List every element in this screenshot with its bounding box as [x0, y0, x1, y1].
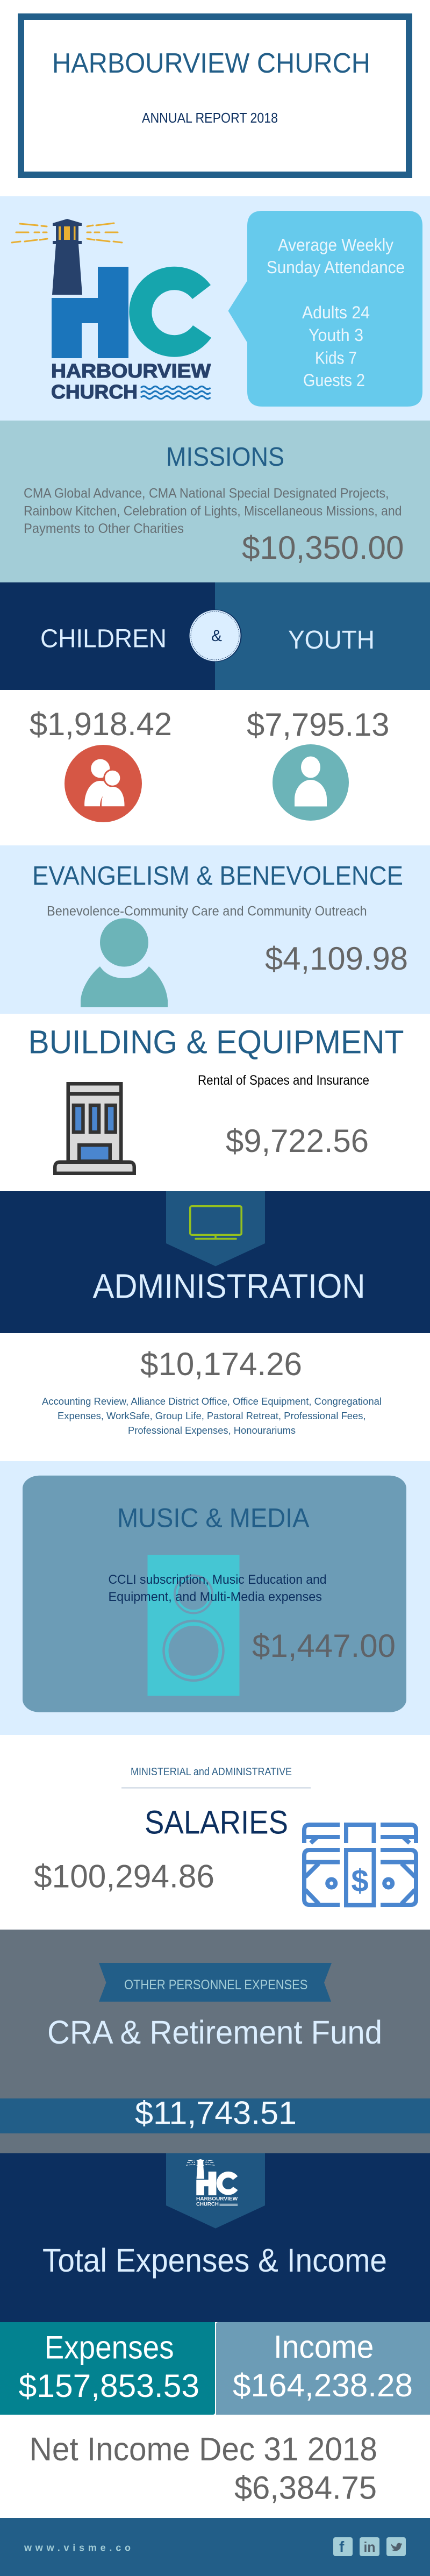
salaries amount: $100,294.86: [34, 1859, 214, 1895]
pennant with monitor icon: [166, 1191, 265, 1266]
icon: money: $: [351, 1863, 369, 1898]
administration description: Accounting Review, Alliance District Office, Office Equipment, Congregational: [42, 1396, 382, 1407]
panel: expenses: Expenses: [45, 2329, 174, 2365]
amount band: [0, 2095, 430, 2133]
administration amount: $10,174.26: [140, 1346, 302, 1382]
logo: Harbourview Church: [12, 219, 211, 403]
callout: average weekly Sunday attendance: Kids 7: [315, 348, 357, 368]
panel: administration header: [0, 1191, 430, 1333]
panel: title frame: [21, 17, 409, 175]
logo: Harbourview Church: HARBOURVIEW: [51, 360, 211, 382]
panel: income: $164,238.28: [233, 2367, 413, 2403]
ampersand badge: [189, 610, 242, 661]
music description: CCLI subscription, Music Education and: [109, 1572, 327, 1587]
panel: total expenses and income: [0, 2153, 430, 2322]
heading: CRA and retirement fund: CRA & Retirement Fund: [47, 2014, 382, 2051]
panel: net income: Net Income Dec 31 2018: [30, 2431, 377, 2467]
icon: money: [304, 1825, 416, 1905]
panel: music and media: [0, 1461, 430, 1735]
music card: [23, 1476, 406, 1712]
panel: children and youth amounts: [0, 690, 430, 845]
icon: linkedin: in: [363, 2539, 375, 2555]
callout: average weekly Sunday attendance: Youth 3: [309, 325, 363, 345]
panel: logo and attendance: [0, 196, 430, 421]
pennant with white logo: [166, 2153, 265, 2229]
panel: children and youth header: [0, 582, 430, 690]
music amount: $1,447.00: [252, 1628, 396, 1664]
icon: white logo: CHURCH: [196, 2202, 219, 2207]
callout: average weekly Sunday attendance: [228, 211, 422, 407]
icon: white logo: HARBOURVIEW: [196, 2196, 238, 2202]
evangelism description: Benevolence-Community Care and Community Outreach: [47, 903, 367, 919]
music description: Equipment, and Multi-Media expenses: [109, 1590, 322, 1604]
heading: administration: ADMINISTRATION: [92, 1267, 366, 1306]
salaries kicker: MINISTERIAL and ADMINISTRATIVE: [131, 1766, 292, 1778]
footer website: www.visme.co: [24, 2543, 131, 2553]
heading: salaries: SALARIES: [145, 1804, 288, 1841]
panel: income: Income: [274, 2329, 374, 2365]
icon: youth: [273, 744, 349, 821]
icon: facebook: f: [339, 2538, 345, 2555]
callout: average weekly Sunday attendance: Adults 24: [302, 303, 370, 322]
heading: total expenses and income: Total Expenses & Income: [42, 2242, 387, 2279]
missions description: CMA Global Advance, CMA National Special Designated Projects,: [24, 486, 389, 501]
panel: net income: [0, 2415, 430, 2518]
heading: youth: YOUTH: [288, 626, 375, 654]
heading: building and equipment: BUILDING & EQUIPMENT: [28, 1024, 404, 1061]
panel: missions: [0, 421, 430, 582]
heading: evangelism and benevolence: EVANGELISM & BENEVOLENCE: [32, 862, 403, 891]
subtitle: ANNUAL REPORT 2018: [142, 110, 278, 126]
panel: income: [216, 2322, 430, 2415]
title: HARBOURVIEW CHURCH: [52, 48, 370, 79]
callout: average weekly Sunday attendance: Guests 2: [303, 371, 365, 390]
icon: linkedin: [360, 2537, 379, 2556]
music description: [109, 1572, 327, 1604]
evangelism amount: $4,109.98: [265, 941, 408, 977]
missions amount: $10,350.00: [242, 530, 404, 566]
heading: music and media: MUSIC & MEDIA: [117, 1503, 310, 1533]
callout: average weekly Sunday attendance: Sunday Attendance: [267, 258, 405, 277]
building description: Rental of Spaces and Insurance: [198, 1073, 369, 1088]
panel: footer: [0, 2518, 430, 2576]
icon: speaker: [147, 1555, 240, 1696]
icon: twitter: [386, 2537, 406, 2556]
panel: salaries: [0, 1735, 430, 1930]
icon: white logo: [186, 2159, 238, 2207]
ribbon: OTHER PERSONNEL EXPENSES: [124, 1977, 307, 1993]
ribbon: [99, 1963, 332, 2002]
panel: administration details: [0, 1333, 430, 1461]
building amount: $9,722.56: [226, 1123, 369, 1159]
icon: monitor: [190, 1206, 241, 1239]
icon: facebook: [333, 2537, 353, 2556]
logo: Harbourview Church: CHURCH: [51, 381, 138, 403]
panel: expenses: [0, 2322, 215, 2415]
panel: net income: $6,384.75: [234, 2470, 377, 2506]
administration description: [42, 1396, 382, 1436]
icon: building: [55, 1084, 134, 1173]
panel: evangelism and benevolence: [0, 845, 430, 1014]
panel: expenses: $157,853.53: [19, 2368, 199, 2404]
administration description: Professional Expenses, Honourariums: [128, 1425, 296, 1436]
callout: average weekly Sunday attendance: Average Weekly: [278, 236, 393, 255]
administration description: Expenses, WorkSafe, Group Life, Pastoral Retreat, Professional Fees,: [58, 1411, 366, 1421]
amount band: $11,743.51: [135, 2095, 297, 2131]
youth amount: $7,795.13: [247, 707, 389, 743]
panel: building and equipment: [0, 1014, 430, 1191]
children amount: $1,918.42: [30, 706, 172, 742]
ampersand badge: &: [211, 627, 222, 645]
icon: children: [64, 745, 142, 822]
heading: children: CHILDREN: [40, 625, 167, 653]
missions description: Rainbow Kitchen, Celebration of Lights, Miscellaneous Missions, and: [24, 504, 402, 519]
missions description: [24, 486, 402, 536]
heading: missions: MISSIONS: [166, 443, 284, 472]
missions description: Payments to Other Charities: [24, 521, 184, 536]
panel: other personnel expenses: [0, 1930, 430, 2153]
icon: person: [81, 919, 168, 1007]
